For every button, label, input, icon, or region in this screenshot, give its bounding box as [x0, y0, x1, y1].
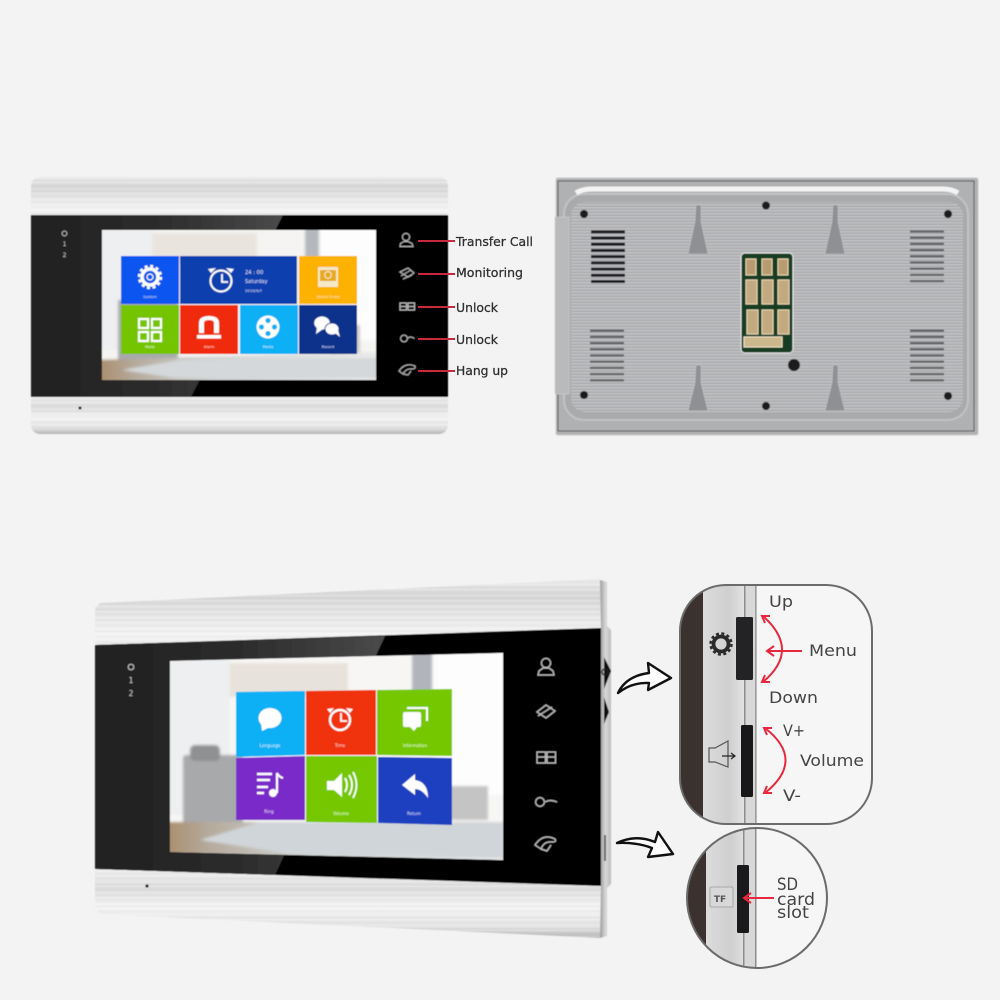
label: SD card slot: card — [777, 890, 815, 909]
label: Unlock (top): Unlock — [456, 301, 498, 315]
detail outline — [680, 585, 872, 824]
label: Unlock (top) — [418, 301, 498, 315]
room wallpaper — [169, 652, 504, 861]
touch icon: transfer call — [400, 233, 413, 246]
status indicators: 2 — [63, 252, 67, 259]
arrow: to button detail — [618, 663, 671, 693]
device side photo — [687, 828, 756, 968]
status indicators: 1 — [63, 241, 67, 248]
label: V-: V- — [783, 786, 801, 805]
bottom silver frame — [95, 868, 601, 938]
detail background — [687, 828, 827, 968]
touch icon: key — [536, 798, 557, 806]
detail outline — [687, 828, 827, 968]
tile: Return — [378, 757, 452, 825]
label: Volume: Volume — [800, 751, 864, 770]
tile: Ring: Ring — [264, 809, 274, 814]
tile: Language — [236, 691, 305, 757]
top silver frame — [31, 177, 448, 216]
label: Menu: Menu — [809, 641, 857, 660]
tile: Clock: 24 : 00 — [245, 270, 263, 276]
tile: Time — [306, 690, 376, 755]
label: Up: Up — [769, 592, 793, 611]
tile: Digital Photo: Digital Photo — [316, 295, 340, 299]
connector board — [741, 253, 793, 353]
detail background — [680, 585, 872, 824]
side buttons — [602, 657, 611, 861]
tile: Media — [240, 305, 298, 354]
touch icon: monitoring — [537, 705, 555, 718]
label: SD card slot: SD — [777, 875, 798, 894]
tile: Information: Information — [403, 743, 427, 748]
right side strip — [600, 580, 611, 938]
mounting slots — [688, 205, 845, 411]
callout: SD card slot detail — [687, 828, 827, 968]
tile: Clock — [180, 256, 297, 304]
label: SD card slot: slot — [777, 903, 810, 922]
tile: Volume — [306, 756, 377, 823]
label: V+: V+ — [783, 721, 805, 740]
label: Unlock (bottom) — [418, 333, 498, 347]
outer case — [556, 178, 978, 435]
tile: Return: Return — [407, 811, 421, 816]
callout lines and labels — [418, 235, 533, 378]
touch icon: monitoring — [400, 268, 414, 279]
label: Monitoring: Monitoring — [456, 266, 523, 280]
ribbed back plate — [571, 202, 963, 412]
tile: Media: Media — [263, 345, 273, 349]
black glass panel — [31, 215, 448, 397]
screen base — [102, 230, 376, 380]
label: Transfer Call — [418, 235, 533, 249]
red arrow: SD slot — [744, 893, 774, 903]
touch icon: transfer call — [538, 658, 554, 675]
touch icon: hang up — [399, 365, 415, 375]
touch icon: hang up — [535, 837, 556, 851]
tile: Alarm: Alarm — [204, 345, 215, 349]
status indicators: 1 — [129, 676, 134, 685]
label: Unlock (bottom): Unlock — [456, 333, 498, 347]
screen — [95, 225, 380, 385]
raised rim — [564, 194, 968, 420]
screen — [169, 652, 504, 861]
arrow: to SD slot detail — [617, 832, 673, 857]
left side tab — [555, 217, 569, 394]
red arrows: menu — [762, 616, 802, 682]
touch icon: unlock panel — [537, 752, 556, 763]
vents — [590, 228, 944, 384]
status indicators — [62, 231, 67, 259]
label: Transfer Call: Transfer Call — [455, 235, 533, 249]
label: Down: Down — [769, 688, 818, 707]
screws — [580, 202, 952, 410]
bottom silver frame — [31, 396, 448, 434]
touch icon: key — [401, 335, 414, 342]
tile: Ring — [236, 756, 305, 820]
panel: monitor back view — [555, 178, 978, 435]
tile: Clock: Saturday — [245, 279, 268, 285]
tile: System — [121, 256, 179, 304]
microphone hole — [145, 884, 149, 888]
label: Hang up: Hang up — [456, 364, 508, 378]
panel: monitor front view — [31, 177, 448, 434]
status indicators: 2 — [129, 689, 134, 698]
bright top rim highlight — [576, 189, 958, 193]
tile: System: System — [143, 295, 157, 299]
tile: Alarm — [180, 305, 238, 354]
icon: TF card: TF — [714, 895, 726, 905]
icon: gear — [710, 634, 732, 654]
tile: Clock: 2019/9/7 — [245, 288, 263, 293]
glass reflection — [95, 636, 385, 875]
glass reflection — [31, 215, 283, 397]
microphone hole — [78, 406, 82, 410]
touch icon: unlock panel — [400, 303, 414, 310]
panel: monitor angled view — [95, 579, 611, 938]
tile: Mode: Mode — [145, 345, 156, 349]
device side photo — [680, 585, 757, 824]
tile: Record: Record — [322, 345, 334, 349]
room wallpaper — [95, 225, 380, 385]
tile: Record — [299, 305, 357, 354]
black glass panel — [95, 628, 601, 886]
callout: side buttons detail — [680, 585, 872, 824]
tile: Information — [377, 689, 452, 756]
label: SD card slot — [777, 875, 815, 922]
tile: Time: Time — [334, 743, 346, 748]
tile: Digital Photo — [299, 256, 357, 304]
label: Monitoring — [418, 266, 523, 280]
tile: Mode — [121, 305, 179, 354]
icon: speaker — [709, 741, 735, 767]
tile: Volume: Volume — [333, 811, 349, 816]
tile: Language: Language — [260, 743, 281, 748]
red arrows: volume — [764, 728, 786, 793]
status indicators — [128, 664, 134, 698]
label: Hang up — [418, 364, 508, 378]
top silver frame — [95, 579, 601, 645]
screen base — [170, 653, 503, 860]
